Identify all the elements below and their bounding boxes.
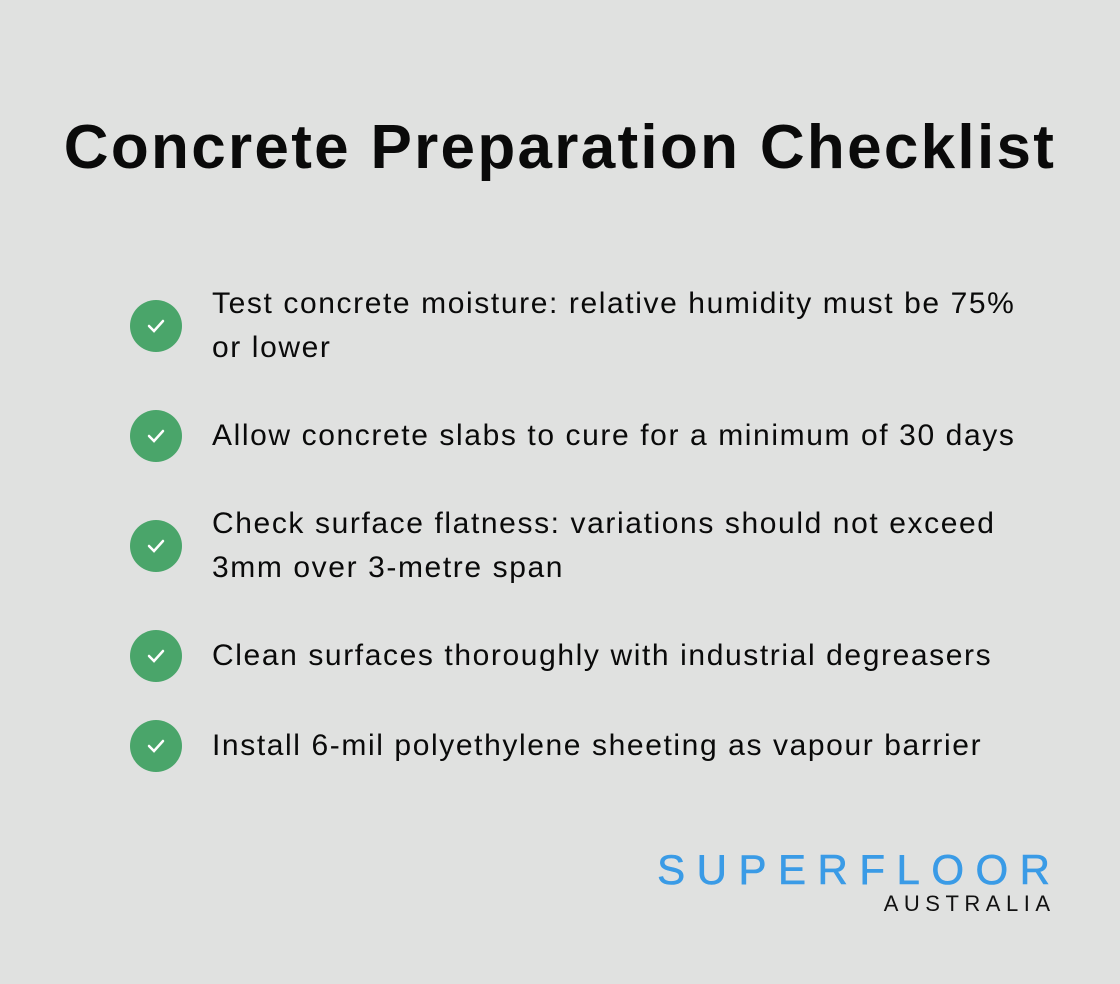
logo: australia: AUSTRALIA xyxy=(884,891,1056,916)
item 5 xyxy=(130,720,982,772)
icon: check xyxy=(130,300,182,352)
text xyxy=(212,287,1015,364)
title: Concrete Preparation Checklist xyxy=(64,113,1056,182)
icon: check xyxy=(130,630,182,682)
icon: check xyxy=(130,520,182,572)
item 3 xyxy=(130,507,996,584)
text: Allow concrete slabs to cure for a minimum of 30 days xyxy=(212,419,1015,452)
icon: check xyxy=(130,410,182,462)
text: Clean surfaces thoroughly with industrial degreasers xyxy=(212,639,992,672)
text: or lower xyxy=(212,331,332,364)
text: Check surface flatness: variations should not exceed xyxy=(212,507,996,540)
item 4 xyxy=(130,630,992,682)
icon: check xyxy=(130,720,182,772)
logo xyxy=(657,846,1062,916)
logo: superfloor: SUPERFLOOR xyxy=(657,846,1062,893)
item 1 xyxy=(130,287,1015,364)
text: 3mm over 3-metre span xyxy=(212,551,564,584)
text xyxy=(212,507,996,584)
item 2 xyxy=(130,410,1015,462)
text: Install 6-mil polyethylene sheeting as vapour barrier xyxy=(212,729,982,762)
text: Test concrete moisture: relative humidity must be 75% xyxy=(212,287,1015,320)
